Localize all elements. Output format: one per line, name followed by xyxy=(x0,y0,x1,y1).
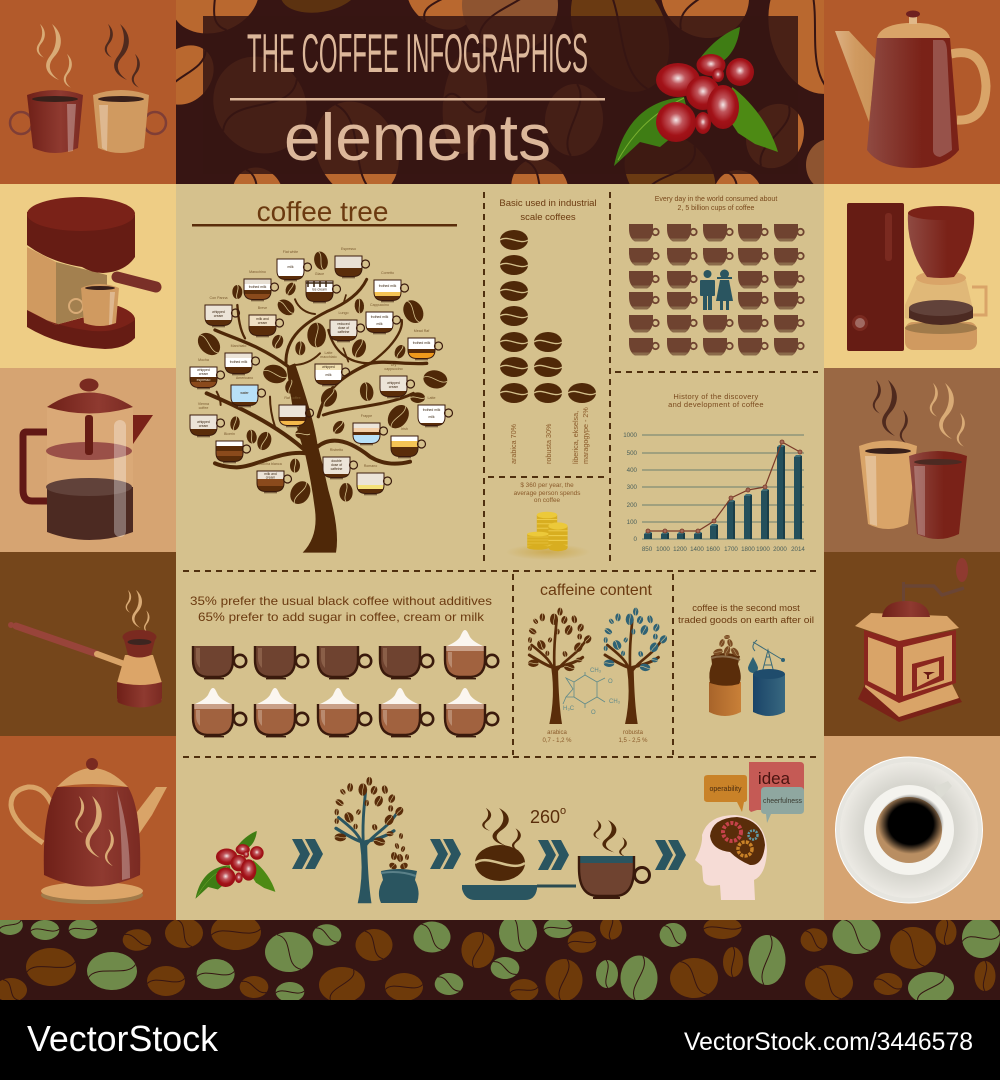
cup: raf coffee: Raf coffee xyxy=(284,396,301,400)
text: image reference: VectorStock.com/3446578 xyxy=(684,1028,973,1056)
cup: mocha: espresso xyxy=(197,378,210,382)
callout: operability xyxy=(704,775,747,812)
cup: con panna xyxy=(205,296,240,327)
text: traded line two: traded goods on earth after oil xyxy=(678,615,814,626)
heading: history line one: History of the discovery xyxy=(673,392,759,401)
icon: coffee berries xyxy=(614,27,778,166)
icon: french press xyxy=(23,378,153,540)
icon: coffee grinder xyxy=(855,558,968,722)
panel: footer bar xyxy=(0,1000,1000,1080)
panel: yearly spend xyxy=(506,482,590,560)
cup: dry cappuccino: whipped xyxy=(387,381,400,385)
cup: mocha: cream xyxy=(199,372,208,376)
cup: breve: cream xyxy=(258,321,267,325)
label: arabica: arabica 70% xyxy=(509,423,518,464)
chart: bars and trend line: 1700 xyxy=(724,546,738,553)
icon: oil cylinder and pump xyxy=(748,640,785,716)
panel: traded goods xyxy=(678,603,814,716)
chart: bars and trend line: 1900 xyxy=(756,546,770,553)
cup: latte macchiato: macchiato xyxy=(320,355,337,359)
cup: ristretto: double xyxy=(331,459,342,463)
chart: bars and trend line: 850 xyxy=(642,546,653,553)
icon: bag of beans xyxy=(379,833,419,903)
cup: mocha blanca: cream xyxy=(266,476,275,480)
text: additive preference: 65% prefer to add sugar in coffee, cream or milk xyxy=(198,610,485,624)
callout: idea xyxy=(749,762,804,812)
cup: latte: milk xyxy=(428,415,435,419)
text: brand: VectorStock xyxy=(27,1018,219,1059)
panel: left column tile with french press xyxy=(0,368,176,552)
tree trunk and branches xyxy=(207,279,427,553)
icon: coffee pot xyxy=(835,10,986,168)
icon: tan tall cup xyxy=(859,440,917,529)
cup: lungo: caffeine xyxy=(338,330,350,334)
cup: ristretto: Ristretto xyxy=(330,448,343,452)
cup: con panna: Con Panna xyxy=(210,296,227,300)
cup: mocha xyxy=(190,358,224,389)
diagram: caffeine molecule: CH₃ xyxy=(590,668,602,674)
icon: arabica tree xyxy=(528,608,593,724)
cup: latte: frothed milk xyxy=(423,408,441,412)
cup: vienna coffee: whipped xyxy=(197,420,210,424)
tree beans xyxy=(193,250,449,508)
title rule xyxy=(230,98,605,100)
bean pattern xyxy=(0,920,1000,1000)
icon: cezve xyxy=(8,622,162,708)
chart: bars and trend line: 100 xyxy=(627,519,638,526)
label: arabica percent: 0,7 - 1,2 % xyxy=(542,738,572,744)
icon: woman xyxy=(716,270,733,310)
icon: tan mug xyxy=(93,90,166,153)
cup: marochino: Marochino xyxy=(249,270,266,274)
arrow: second chevrons xyxy=(430,839,461,869)
icon: red mug xyxy=(10,90,83,153)
cup: espresso: Espresso xyxy=(341,247,356,251)
icon: saucer and cup xyxy=(836,757,982,903)
callout: cheerfulness: cheerfulness xyxy=(763,796,802,805)
diagram: caffeine molecule: O xyxy=(591,710,596,716)
chart: bars and trend line: 200 xyxy=(627,502,638,509)
cup: dry cappuccino xyxy=(380,363,414,398)
panel: caffeine content xyxy=(528,582,669,744)
chart: bars and trend line: 1200 xyxy=(673,546,687,553)
diagram: caffeine molecule: O xyxy=(608,679,613,685)
chart: bars and trend line: 2000 xyxy=(773,546,787,553)
diagram: caffeine molecule xyxy=(563,668,621,716)
cup: cappuccino: milk xyxy=(376,322,383,326)
chart: bars and trend line: 1000 xyxy=(656,546,670,553)
pictogram: cup grid xyxy=(629,224,804,356)
cup: mead raf xyxy=(408,329,442,360)
diagram: caffeine molecule: H₃C xyxy=(563,706,575,712)
cup: bicerin xyxy=(216,432,250,463)
cup: raf coffee xyxy=(279,396,314,427)
cup: latte macchiato: whipped xyxy=(322,365,335,369)
cup: lungo: dose of xyxy=(338,326,349,330)
cup: romano xyxy=(357,464,392,495)
cup: lungo: reduced xyxy=(337,322,350,326)
icon: cezve steam xyxy=(126,590,150,633)
icon: red tall cup xyxy=(909,451,967,539)
cup: cappuccino xyxy=(366,303,400,334)
icon: coffee tree with teal trunk xyxy=(334,777,405,903)
heading rule xyxy=(192,224,457,226)
cup: marchiato xyxy=(225,344,260,375)
icon: kettle xyxy=(11,758,167,904)
cup: mocha blanca xyxy=(257,462,292,493)
icon: steam over tan mug xyxy=(105,24,140,88)
cup: breve: milk and xyxy=(256,317,269,321)
icon: berries xyxy=(195,831,275,899)
icon: espresso machine xyxy=(27,197,156,349)
cup: irish: Irish xyxy=(401,427,408,431)
chart: bars and trend line xyxy=(623,432,805,553)
panel: coffee production process xyxy=(195,762,804,903)
icon: coin stacks xyxy=(506,512,590,560)
cup: frappe xyxy=(353,414,388,445)
text: black coffee preference: 35% prefer the usual black coffee without additives xyxy=(190,594,492,608)
icon: head with gears xyxy=(695,815,767,900)
panel: coffee preferences xyxy=(190,594,498,737)
cup: latte macchiato xyxy=(315,351,350,386)
cup: glace: ice cream xyxy=(312,288,327,292)
cup: breve xyxy=(249,306,284,337)
cup: dry cappuccino: Dry xyxy=(391,363,396,367)
cup: ristretto xyxy=(323,448,358,479)
cup: irish xyxy=(391,427,426,458)
label: robusta percent: 1,5 - 2,5 % xyxy=(618,738,648,744)
cup: ristretto: dose of xyxy=(331,463,342,467)
icon: finished cup xyxy=(579,820,650,899)
cup: marchiato: frothed milk xyxy=(230,360,248,364)
cup: flat white: milk xyxy=(287,265,294,269)
cup: cappuccino: frothed milk xyxy=(371,315,389,319)
subtitle: elements xyxy=(284,100,551,174)
cup: con panna: whipped xyxy=(212,310,225,314)
panel: right column tile with coffee pot xyxy=(824,0,1000,184)
cup: cappuccino: Cappuccino xyxy=(370,303,389,307)
icon: robusta tree xyxy=(604,608,669,724)
panel: history chart xyxy=(623,392,805,553)
panel: right column tile with cup from above xyxy=(824,736,1000,920)
cup: vienna coffee: cream xyxy=(199,424,208,428)
panel: industrial coffee types xyxy=(499,198,597,464)
section dividers xyxy=(183,192,818,757)
icon: steam over red mug xyxy=(37,24,72,88)
callout: operability: operability xyxy=(710,784,742,793)
chart: coffee tree with cups xyxy=(190,247,452,553)
diagram: caffeine molecule: CH₃ xyxy=(609,699,621,705)
cup: mead raf: Mead Raf xyxy=(414,329,429,333)
panel: right column tile with coffee grinder xyxy=(824,552,1000,736)
cup: marochino: frothed milk xyxy=(249,285,267,289)
label: roast temperature: o xyxy=(560,805,566,817)
text: spend line two: average person spends xyxy=(514,490,580,497)
cup: frappe: Frappe xyxy=(361,414,372,418)
arrow: fourth chevrons xyxy=(655,840,686,870)
panel: left column tile with espresso machine xyxy=(0,184,176,368)
arrow: first chevrons xyxy=(292,839,323,869)
cup: latte macchiato: Latte xyxy=(324,351,332,355)
text: consumption line one: Every day in the world consumed about xyxy=(655,196,777,203)
icon: light steam xyxy=(930,383,965,447)
pictogram: ten cups xyxy=(193,630,498,737)
panel: left column tile with cezve xyxy=(0,552,176,736)
cup: glace xyxy=(306,272,340,303)
label: liberica: liberica, ekselsa, xyxy=(571,411,580,464)
header dark overlay xyxy=(203,16,798,174)
pictogram: bean columns xyxy=(500,230,596,403)
cup: lungo: Lungo xyxy=(338,311,348,315)
header bean pattern xyxy=(176,0,824,184)
icon: coffee cylinder and sack xyxy=(709,635,741,716)
icon: man xyxy=(700,270,715,310)
chart: bars and trend line: 1400 xyxy=(690,546,704,553)
cup: glace: Glace xyxy=(315,272,324,276)
chart: bars and trend line: 500 xyxy=(627,450,638,457)
icon: drip coffee maker xyxy=(847,203,986,351)
heading: caffeine content: caffeine content xyxy=(540,582,653,599)
text: traded line one: coffee is the second most xyxy=(692,603,800,614)
callout: idea: idea xyxy=(758,769,791,788)
cup: lungo xyxy=(330,311,364,342)
cup: mocha: whipped xyxy=(197,368,210,372)
callout: cheerfulness xyxy=(761,787,804,823)
cup: americano: water xyxy=(240,391,250,395)
cup: bicerin: Bicerin xyxy=(224,432,235,436)
cup: con panna: cream xyxy=(214,314,223,318)
label: robusta: robusta 30% xyxy=(544,423,553,464)
cup: dry cappuccino: cream xyxy=(389,385,398,389)
chart: bars and trend line: 1600 xyxy=(706,546,720,553)
heading: history line two: and development of coffee xyxy=(668,400,764,409)
cup: mead raf: frothed milk xyxy=(413,341,431,345)
chart: bars and trend line: 400 xyxy=(627,467,638,474)
text: consumption line two: 2, 5 billion cups of coffee xyxy=(678,205,755,212)
panel: right column tile with drip coffee maker xyxy=(824,184,1000,368)
cup: flat white: Flat white xyxy=(283,250,298,254)
panel: bean pattern band xyxy=(0,920,1000,1000)
heading: basic used: Basic used in industrial xyxy=(499,198,597,209)
arrow: third chevrons xyxy=(538,840,569,870)
cup: marchiato: Marchiato xyxy=(231,344,246,348)
heading line two: scale coffees xyxy=(520,212,576,223)
label: arabica range: arabica xyxy=(547,730,567,736)
cup: latte macchiato: milk xyxy=(325,373,332,377)
text: spend line one: $ 360 per year, the xyxy=(520,482,574,489)
cup: ristretto: caffeine xyxy=(331,467,343,471)
cup: vienna coffee: Vienna xyxy=(198,402,209,406)
cup: vienna coffee: coffee xyxy=(199,406,208,410)
panel: right column tile with two tall cups xyxy=(824,368,1000,552)
cup: latte: Latte xyxy=(428,396,436,400)
panel: header banner xyxy=(176,0,824,184)
chart: bars and trend line: 1800 xyxy=(741,546,755,553)
label: roast temperature: 260 xyxy=(530,807,560,827)
cup: corretto: frothed milk xyxy=(379,284,397,288)
panel: daily consumption xyxy=(629,196,804,356)
cup: corretto xyxy=(374,271,408,302)
cup: americano xyxy=(231,376,266,407)
chart: bars and trend line: 300 xyxy=(627,484,638,491)
panel: left column tile with two mugs xyxy=(0,0,176,184)
cup: mocha blanca: milk and xyxy=(264,472,277,476)
cup: mocha: Mocha xyxy=(198,358,209,362)
cup: americano: Americano xyxy=(236,376,253,380)
chart: bars and trend line: 1000 xyxy=(623,432,638,439)
cup: romano: Romano xyxy=(364,464,377,468)
label: robusta range: robusta xyxy=(623,730,644,736)
label: maragogype: maragogype - 2% xyxy=(581,407,590,464)
cup: mocha blanca: Mocha blanca xyxy=(259,462,282,466)
cup: breve: Breve xyxy=(258,306,267,310)
chart: bars and trend line: 0 xyxy=(634,536,638,543)
cup: latte xyxy=(418,396,452,427)
text: spend line three: on coffee xyxy=(534,497,561,504)
icon: roasting bean and pan xyxy=(462,808,576,900)
cup: flat white xyxy=(277,250,312,281)
icon: dark steam xyxy=(873,380,908,444)
cup: dry cappuccino: cappuccino xyxy=(384,367,403,371)
cup: marochino xyxy=(244,270,278,301)
cup: espresso xyxy=(335,247,370,278)
cup: corretto: Corretto xyxy=(381,271,394,275)
heading: coffee tree: coffee tree xyxy=(257,196,388,227)
chart: bars and trend line: 2014 xyxy=(791,546,805,553)
cup: vienna coffee xyxy=(190,402,224,437)
panel: left column tile with kettle xyxy=(0,736,176,920)
